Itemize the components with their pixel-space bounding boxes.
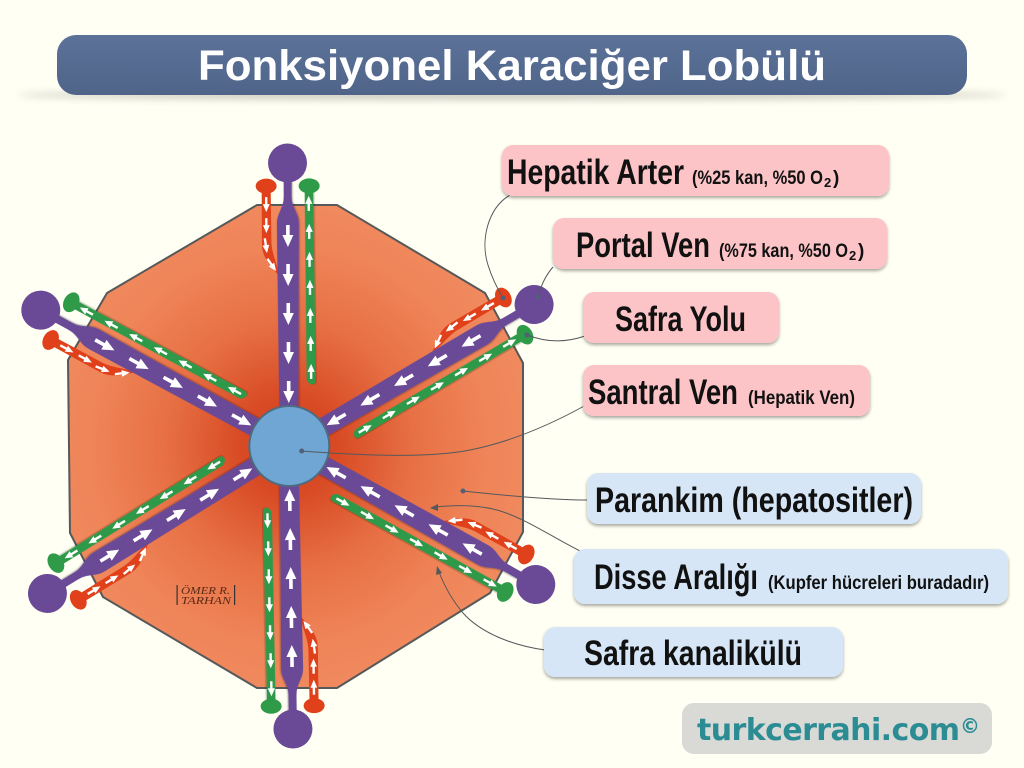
label: hepatic artery: 2 xyxy=(824,175,831,190)
label: central vein xyxy=(583,365,870,416)
signature xyxy=(176,585,235,607)
bile duct xyxy=(258,508,282,714)
arm: lower right triad xyxy=(305,436,568,622)
label: hepatic artery: ) xyxy=(833,168,839,189)
leader line: parenchyma xyxy=(460,488,587,500)
title shadow xyxy=(17,90,1007,100)
portal vein branch xyxy=(311,278,561,446)
hepatic artery branch xyxy=(442,501,538,569)
central vein xyxy=(249,406,329,486)
signature: ÖMER R. xyxy=(181,585,230,597)
bile duct xyxy=(299,178,321,384)
hepatic artery branch xyxy=(65,542,161,613)
label: Disse space: Disse Aralığı xyxy=(594,558,758,597)
label: Disse space xyxy=(574,549,1008,604)
bile duct xyxy=(44,451,231,576)
website credit: turkcerrahi.com xyxy=(697,713,960,748)
label: portal vein: 2 xyxy=(849,248,856,263)
label: central vein: (Hepatik Ven) xyxy=(748,388,855,409)
label: hepatic artery xyxy=(502,145,889,196)
arm: upper right triad xyxy=(305,267,567,456)
hepatic artery branch xyxy=(420,285,516,354)
label: Disse space: (Kupfer hücreleri buradadır) xyxy=(768,573,989,594)
hepatic artery branch xyxy=(256,179,279,276)
label: portal vein: (%75 kan, %50 O xyxy=(719,241,848,262)
label: bile duct: Safra Yolu xyxy=(615,300,746,339)
label: bile duct xyxy=(583,292,779,343)
bile duct xyxy=(60,289,250,407)
label: portal vein xyxy=(553,218,887,269)
label: central vein: Santral Ven xyxy=(588,373,738,412)
leader line: bile canaliculus xyxy=(436,566,545,650)
label: portal vein: ) xyxy=(858,241,864,262)
title text: Fonksiyonel Karaciğer Lobülü xyxy=(198,42,826,90)
leader line: portal vein xyxy=(536,267,553,300)
label: hepatic artery: (%25 kan, %50 O xyxy=(692,168,823,189)
website credit: © xyxy=(960,714,980,738)
label: parenchyma: Parankim (hepatositler) xyxy=(595,481,913,520)
portal vein branch xyxy=(14,284,267,446)
liver lobule hexagon xyxy=(68,205,523,688)
bile duct xyxy=(348,322,537,444)
label: bile canaliculus xyxy=(544,627,843,677)
hepatic artery branch xyxy=(39,325,136,392)
leader line: hepatic artery xyxy=(485,195,510,300)
label: bile canaliculus: Safra kanalikülü xyxy=(584,634,802,673)
hepatic artery branch xyxy=(300,616,325,713)
bile duct xyxy=(327,486,517,605)
portal vein branch xyxy=(268,143,308,410)
portal vein branch xyxy=(21,448,268,620)
label: hepatic artery: Hepatik Arter xyxy=(507,153,684,192)
label: portal vein: Portal Ven xyxy=(576,226,710,265)
leader line: central vein xyxy=(299,405,586,455)
leader line: Disse space xyxy=(430,504,582,552)
signature: TARHAN xyxy=(181,595,232,607)
label: parenchyma xyxy=(587,473,921,524)
arm: upper left triad xyxy=(8,273,273,457)
arm: lower left triad xyxy=(14,437,275,631)
arm: bottom triad xyxy=(258,482,325,749)
portal vein branch xyxy=(270,482,313,749)
website credit xyxy=(682,703,992,754)
portal vein branch xyxy=(311,447,562,611)
arm: top triad xyxy=(255,143,321,410)
title banner xyxy=(57,35,967,95)
leader line: bile duct xyxy=(524,332,585,341)
